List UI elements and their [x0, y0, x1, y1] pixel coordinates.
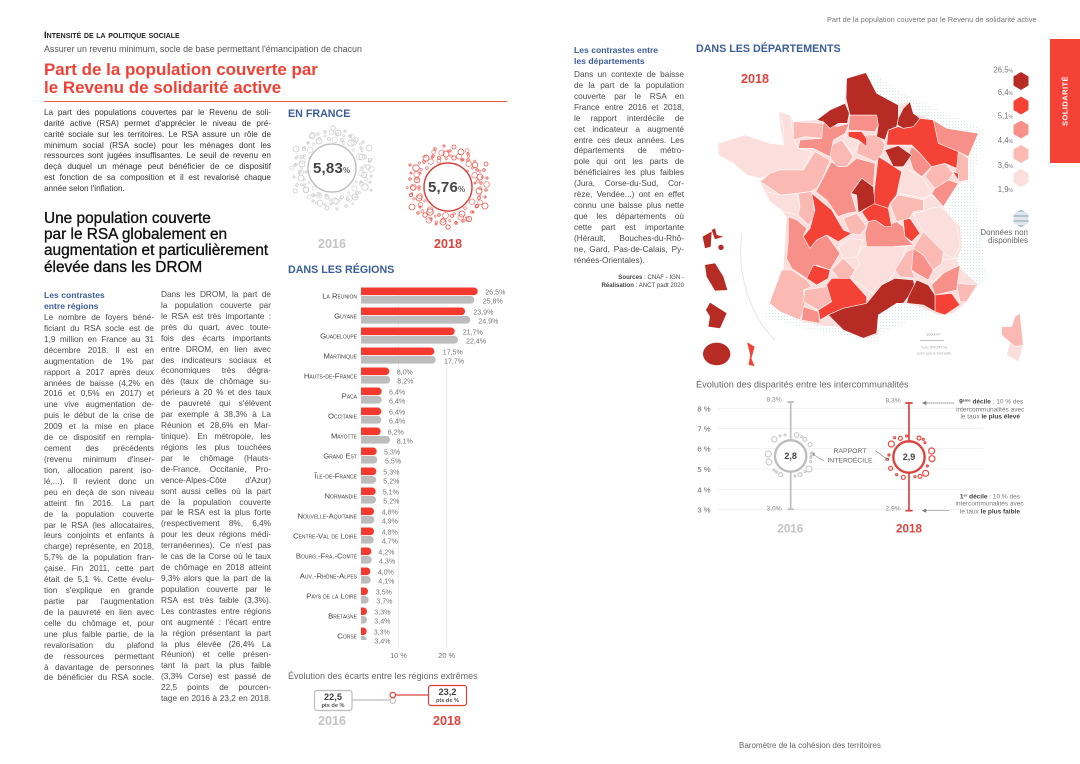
- text column 2: par le chômage (Hauts-: [161, 454, 271, 463]
- graphics layer: [288, 66, 1028, 725]
- text column 2: RSA est très faible (3,3%).: [161, 596, 271, 605]
- year label 2018: 2018: [896, 522, 922, 535]
- subheading: contrasts between departments: les départements: [574, 56, 645, 66]
- bar values: 5,2%: [383, 478, 400, 486]
- bar values: 5,5%: [385, 458, 402, 466]
- bar chart regions: [293, 288, 506, 660]
- intro text: minimum social (RSA socle) pour les ménages dont les: [44, 141, 271, 150]
- legend: 4,4%: [998, 136, 1014, 145]
- text column 2: régions les plus touchées: [161, 443, 271, 452]
- 2018 range: 8,3%: [885, 398, 901, 405]
- region labels: La Réunion: [322, 292, 357, 300]
- map scale: *Les DROM ne: [921, 345, 948, 350]
- subheading: contrasts between regions: Les contrastes: [44, 290, 105, 300]
- map scale: 100 km*: [926, 332, 941, 337]
- high departments: [747, 118, 960, 367]
- text column 1: années de baisse (4,2% en: [44, 379, 154, 388]
- bottom decile note: : 10 % des: [989, 493, 1020, 500]
- text column 2: 22,5 points de pourcen-: [161, 683, 271, 692]
- legend: 3,6%: [998, 161, 1014, 170]
- map scale: sont pas à l'échelle: [917, 350, 952, 355]
- bar values: 17,5%: [443, 348, 464, 356]
- region labels: Guadeloupe: [320, 332, 358, 340]
- disparities chart: [696, 379, 1025, 535]
- bar values: 3,7%: [376, 598, 393, 606]
- bar values: 3,4%: [374, 638, 391, 646]
- value box 2016: [314, 690, 352, 710]
- text column 2: terranéennes). Ce n'est pas: [161, 541, 271, 550]
- intro text: La part des populations couvertes par le Revenu de soli-: [44, 108, 271, 117]
- text column 3: que les départements où: [574, 212, 684, 221]
- axis labels: 10 %: [390, 651, 407, 660]
- title rule: [44, 101, 507, 102]
- text column 1: tion s'explique en grande: [44, 586, 154, 595]
- lightest departments: [718, 112, 1023, 362]
- legend: Données non: [980, 228, 1028, 237]
- bar values: 4,7%: [382, 538, 399, 546]
- bar values: [374, 288, 506, 646]
- text column 2: tant la part la plus faible: [161, 661, 271, 670]
- text column 3: cette part est importante: [574, 223, 684, 232]
- 2016 range: 3,0%: [766, 505, 782, 512]
- intro text: est fonction de sa composition et il est revalorisé chaque: [44, 173, 271, 182]
- bar values: 5,3%: [383, 468, 400, 476]
- text column 1: leurs conjoints et enfants à: [44, 531, 154, 540]
- value box 2018: 23,2: [439, 687, 456, 697]
- text column 1: 2009 et la mise en place: [44, 422, 154, 431]
- text column 2: Dans les DROM, la part de: [161, 290, 271, 299]
- icon: 2018 ring: [397, 134, 500, 239]
- region labels: Occitanie: [328, 412, 358, 420]
- text column 1: par le RSA (les allocataires,: [44, 521, 154, 530]
- text column 1: une plus faible partie, de la: [44, 630, 154, 639]
- text column 3: bénéficiaires les plus faibles: [574, 168, 684, 177]
- text column 2: Réunion et 28,6% en Mar-: [161, 421, 271, 430]
- map of departments: [703, 72, 1023, 367]
- text column 2: (3,3% Corse) est passé de: [161, 672, 271, 681]
- bar values: 4,9%: [382, 518, 399, 526]
- text column 2: de pauvreté qui s'élèvent: [161, 399, 271, 408]
- region labels: Pays de la Loire: [306, 592, 358, 600]
- region labels: Grand Est: [323, 452, 357, 460]
- text column 3: (Hérault, Bouches-du-Rhô-: [574, 234, 684, 243]
- bar values: 4,1%: [378, 578, 395, 586]
- text column 2: population couverte par le: [161, 585, 271, 594]
- intro text: ressources sont jugées insuffisantes. Le seuil de revenu en: [44, 151, 271, 160]
- region labels: Martinique: [323, 352, 358, 360]
- text column 1: rapport à 2017 après deux: [44, 368, 154, 377]
- top decile note: 9: [959, 398, 991, 406]
- 2016 range: 8,3%: [766, 396, 782, 403]
- text column 1: [44, 313, 154, 682]
- bottom decile note: décile: [967, 493, 988, 500]
- key figures France: [281, 115, 500, 251]
- bottom decile note: 1: [960, 492, 988, 500]
- top decile note: : 10 % des: [993, 399, 1023, 406]
- intro text: année selon l'inflation.: [44, 184, 125, 193]
- text column 1: de la pauvreté en lien avec: [44, 608, 154, 617]
- main heading: augmentation et particulièrement: [44, 242, 268, 259]
- text column 2: fois des écarts importants: [161, 334, 271, 343]
- text column 2: par exemple à 38,3% à La: [161, 410, 271, 419]
- text column 3: France entre 2016 et 2018,: [574, 103, 684, 112]
- title: [44, 60, 318, 97]
- text column 3: [574, 70, 684, 265]
- bar values: 25,8%: [483, 298, 504, 306]
- gap chart between extreme regions: Évolution des écarts entre les régions extrêmes: [288, 671, 478, 681]
- sources: Sources : CNAF - IGN -: [618, 274, 684, 281]
- 2018 range: 2,9: [903, 452, 915, 462]
- y axis labels: 3 %: [697, 505, 711, 514]
- text column 1: de bénéficier du RSA socle.: [44, 673, 154, 682]
- text column 3: connu une baisse plus nette: [574, 201, 684, 210]
- axis labels: 20 %: [438, 651, 456, 660]
- value box 2018: pts de %: [436, 698, 459, 704]
- value box 2018: [428, 686, 466, 706]
- region labels: Bretagne: [328, 612, 358, 620]
- bottom decile note: er: [964, 492, 968, 497]
- region labels: Hauts-de-France: [304, 372, 358, 380]
- bar values: 6,2%: [388, 428, 405, 436]
- text column 1: était de 5,1 %. Cette évolu-: [44, 575, 154, 584]
- mainland silhouette: [717, 73, 978, 338]
- bottom decile note: [923, 492, 1024, 515]
- section subtitle: Assurer un revenu minimum, socle de base permettant l'émancipation de chacun: [44, 44, 362, 54]
- y axis labels: 8 %: [697, 404, 711, 413]
- bar values: 4,8%: [382, 508, 399, 516]
- region labels: Mayotte: [331, 432, 358, 440]
- bar values: 4,3%: [379, 558, 396, 566]
- disparities chart: Évolution des disparités entre les intercommunalités: [696, 379, 909, 389]
- 2016 range: [765, 396, 814, 512]
- top decile note: intercommunalités avec: [956, 406, 1025, 413]
- text column 3: couverte par le RSA en: [574, 92, 684, 101]
- intro text: deçà duquel un ménage peut bénéficier de ce dispositif: [44, 162, 271, 171]
- legend: 1,9%: [998, 185, 1014, 194]
- region labels: Île-de-France: [313, 472, 358, 480]
- text column 2: de chômage en 2018 atteint: [161, 563, 271, 572]
- bar values: 24,9%: [478, 318, 499, 326]
- text column 2: 9,3% alors que la part de la: [161, 574, 271, 583]
- highest departments: [817, 73, 935, 338]
- year label 2018: 2018: [434, 237, 462, 251]
- text column 1: (revenu minimum d'inser-: [44, 455, 154, 464]
- text column 1: peu en deçà de son niveau: [44, 488, 154, 497]
- bar values: 3,3%: [374, 608, 391, 616]
- legend: disponibles: [988, 236, 1028, 245]
- text column 2: sont aussi celles où la part: [161, 487, 271, 496]
- bar values: 4,8%: [382, 528, 399, 536]
- text column 1: une vive augmentation de-: [44, 400, 154, 409]
- y axis labels: [697, 404, 711, 514]
- intro text: carité sociale sur les territoires. Le RSA assure un rôle de: [44, 130, 271, 139]
- interdecile label: RAPPORT: [834, 448, 867, 455]
- region labels: Corse: [337, 632, 358, 640]
- text column 2: [161, 290, 271, 703]
- text column 1: tion, allocation parent iso-: [44, 466, 154, 475]
- y axis labels: 5 %: [697, 465, 711, 474]
- text column 1: çaise. Fin 2011, cette part: [44, 564, 154, 573]
- text column 2: la région présentant la part: [161, 629, 271, 638]
- bar values: 22,4%: [466, 338, 487, 346]
- year label 2016: 2016: [777, 522, 804, 535]
- bar values: 6,4%: [389, 408, 406, 416]
- legend: [980, 66, 1028, 245]
- bar values: 3,3%: [374, 628, 391, 636]
- text column 3: Dans un contexte de baisse: [574, 70, 684, 79]
- text column 3: rénées-Orientales).: [574, 256, 645, 265]
- main heading: [44, 210, 268, 276]
- bar values: 4,0%: [378, 568, 395, 576]
- region labels: Auv.-Rhône-Alpes: [300, 572, 358, 580]
- bar values: 3,5%: [376, 588, 393, 596]
- text column 2: (respectivement 8%, 6,4%: [161, 519, 271, 528]
- subheading: contrasts between regions: entre régions: [44, 301, 98, 311]
- bar values: 6,4%: [389, 418, 406, 426]
- text column 1: 2016 et 0,5% en 2017) et: [44, 389, 154, 398]
- sources: [601, 274, 684, 289]
- legend: 6,4%: [998, 88, 1014, 97]
- title: le Revenu de solidarité active: [44, 78, 281, 97]
- top decile note: ème: [963, 398, 971, 403]
- bar values: 5,1%: [383, 488, 400, 496]
- text column 1: partie par l'augmentation: [44, 597, 154, 606]
- 2016 range: 2,8: [784, 451, 797, 461]
- text column 2: vence-Alpes-Côte d'Azur): [161, 476, 271, 485]
- bar values: 3,4%: [374, 618, 391, 626]
- text column 1: lé,...). Il revient donc un: [44, 477, 154, 486]
- text column 1: de la population couverte: [44, 510, 154, 519]
- year label 2016: 2016: [318, 237, 346, 251]
- region labels: Normandie: [324, 492, 358, 500]
- gap chart between extreme regions: [288, 671, 478, 728]
- text column 1: celle du chômage et, pour: [44, 619, 154, 628]
- year label map: 2018: [741, 72, 769, 86]
- icon: 2016 ring: 5,83%: [313, 160, 350, 177]
- bar values: 8,0%: [397, 368, 414, 376]
- text column 2: tinique). En métropole, les: [161, 432, 271, 441]
- y axis labels: 7 %: [697, 424, 711, 433]
- text column 1: atteint fin 2016. La part: [44, 499, 154, 508]
- text column 2: la plus élevée (26,4% La: [161, 640, 271, 648]
- top decile note: [923, 398, 1025, 421]
- text column 2: des indicateurs sociaux et: [161, 356, 271, 365]
- light departments: [760, 122, 1023, 347]
- text column 1: revalorisation du plafond: [44, 641, 154, 650]
- region labels: Centre-Val de Loire: [293, 532, 358, 540]
- text column 2: la population couverte par: [161, 301, 271, 310]
- overseas departments: [703, 228, 730, 365]
- 2018 range: 2,9%: [885, 506, 901, 513]
- year label 2016: 2016: [318, 714, 346, 728]
- top decile note: décile: [971, 399, 991, 406]
- value box 2016: 22,5: [324, 692, 342, 702]
- interdecile label: [811, 448, 888, 464]
- main heading: par le RSA globalement en: [44, 226, 227, 243]
- top decile note: le taux le plus élevé: [960, 414, 1020, 421]
- interdecile label: INTERDÉCILE: [827, 455, 873, 464]
- main heading: Une population couverte: [44, 210, 211, 227]
- bar values: 6,4%: [389, 398, 406, 406]
- bottom decile note: intercommunalités avec: [956, 501, 1024, 508]
- region labels: Paca: [342, 392, 358, 400]
- text column 1: à davantage de personnes: [44, 662, 154, 672]
- running header: Part de la population couverte par le Revenu de solidarité active: [827, 15, 1037, 24]
- text column 1: Le nombre de foyers béné-: [44, 313, 154, 322]
- intro text: darité active (RSA) permet d'apprécier le niveau de pré-: [44, 119, 271, 128]
- heading: in France: EN FRANCE: [288, 108, 350, 120]
- text column 3: (Jura, Corse-du-Sud, Cor-: [574, 179, 684, 188]
- year label 2018: 2018: [433, 714, 461, 728]
- text column 3: cet indicateur a augmenté: [574, 125, 684, 134]
- bar values: 17,7%: [444, 358, 465, 366]
- bar values: 8,2%: [397, 378, 414, 386]
- text column 2: ont augmenté : l'écart entre: [161, 618, 271, 627]
- text column 1: cement des précédents: [44, 444, 154, 453]
- icon: 2018 ring: 5,76%: [428, 179, 465, 196]
- legend: 5,1%: [998, 112, 1014, 120]
- icon: 2016 ring: [281, 115, 384, 220]
- text column 2: Réunion) et celle présen-: [161, 650, 271, 659]
- bar values: 8,1%: [397, 438, 414, 446]
- bar values: 26,5%: [485, 288, 506, 296]
- text column 3: entre ces deux années. Les: [574, 136, 684, 145]
- text column 2: de la population couverte: [161, 498, 271, 507]
- bottom decile note: le taux le plus faible: [960, 508, 1020, 515]
- text column 1: augmentation de 1% par: [44, 357, 154, 366]
- bar values: 23,9%: [473, 308, 494, 316]
- bar values: 5,3%: [384, 448, 401, 456]
- footer: Baromètre de la cohésion des territoires: [739, 741, 881, 750]
- axis labels: [390, 651, 456, 660]
- text column 2: par le RSA est la plus forte: [161, 508, 271, 517]
- subheading: contrasts between regions: [44, 290, 105, 311]
- bar values: 21,7%: [463, 328, 484, 336]
- text column 2: tage en 2016 à 23,2 en 2018.: [161, 694, 271, 703]
- text column 3: pole qui ont les parts de: [574, 157, 684, 166]
- title: Part de la population couverte par: [44, 60, 318, 79]
- heading: in regions: DANS LES RÉGIONS: [288, 264, 394, 276]
- region labels: Bourg.-Fra.-Comté: [296, 552, 358, 560]
- text column 2: le cas de la Corse où le taux: [161, 552, 271, 561]
- text column 2: entre DROM, en lien avec: [161, 345, 271, 354]
- text column 1: de ressources permettant: [44, 652, 154, 661]
- legend: 26,5%: [993, 66, 1014, 74]
- text column 3: ne, Gard, Pas-de-Calais, Py-: [574, 245, 684, 254]
- side tab: SOLIDARITÉ: [1060, 76, 1070, 126]
- text column 2: de-France, Occitanie, Pro-: [161, 465, 271, 474]
- text column 3: départements de métro-: [574, 146, 684, 155]
- intro text: [44, 108, 272, 193]
- region labels: [293, 292, 358, 640]
- y axis labels: 6 %: [697, 445, 711, 454]
- text column 2: dés (taux de chômage su-: [161, 377, 271, 386]
- text column 3: de la part de la population: [574, 81, 684, 90]
- text column 3: le rapport interdécile de: [574, 114, 684, 123]
- subheading: contrasts between departments: Les contrastes entre: [574, 45, 658, 55]
- text column 1: ficiant du RSA socle est de: [44, 324, 154, 333]
- bar values: 6,4%: [389, 388, 406, 396]
- text column 1: de ce dispositif en rempla-: [44, 433, 154, 442]
- bar values: 5,2%: [383, 498, 400, 506]
- text column 1: décembre 2018. Il est en: [44, 346, 154, 355]
- main heading: élevée dans les DROM: [44, 259, 202, 276]
- 2018 range: [885, 398, 935, 513]
- value box 2016: pts de %: [321, 703, 345, 709]
- text column 1: puis le début de la crise de: [44, 411, 154, 420]
- side tab: [1050, 39, 1080, 163]
- text column 2: pour les deux régions médi-: [161, 530, 271, 539]
- section label: Intensité de la politique sociale: [44, 30, 180, 41]
- text column 2: le RSA est très importante :: [161, 312, 271, 321]
- text column 2: périeurs à 20 % et des taux: [161, 388, 271, 397]
- text column 2: Les contrastes entre régions: [161, 607, 271, 616]
- subheading: contrasts between departments: [574, 45, 658, 66]
- bar values: 4,2%: [378, 548, 395, 556]
- text column 2: économiques très dégra-: [161, 366, 271, 375]
- y axis labels: 4 %: [697, 485, 711, 494]
- sources: Réalisation : ANCT padt 2020: [601, 282, 684, 289]
- text column 1: charge) représente, en 2018,: [44, 542, 154, 551]
- region labels: Guyane: [334, 312, 358, 320]
- text column 3: rèze, Vendée...) ont en effet: [574, 190, 684, 199]
- heading: in departments: DANS LES DÉPARTEMENTS: [696, 43, 841, 55]
- medium departments: [787, 115, 978, 323]
- map scale: [917, 332, 952, 355]
- text column 2: près du quart, avec toute-: [161, 323, 271, 332]
- text column 1: 5,7% de la population fran-: [44, 553, 154, 562]
- text column 1: 1,9 million en France au 31: [44, 335, 154, 344]
- region labels: Nouvelle-Aquitaine: [297, 512, 358, 520]
